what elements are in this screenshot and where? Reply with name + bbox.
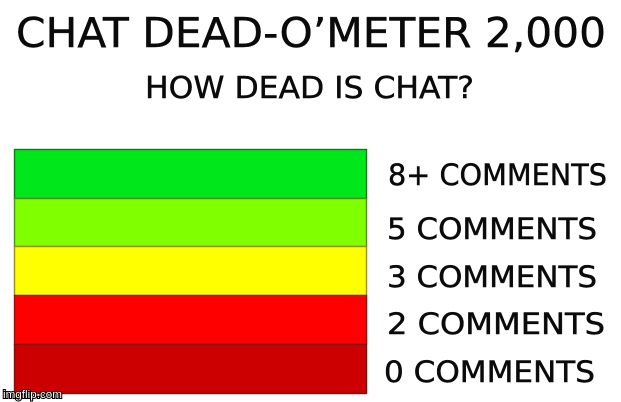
- title: CHAT DEAD-O’METER 2,000: [16, 9, 606, 57]
- label: 8+ comments: 8+ COMMENTS: [388, 158, 607, 192]
- meter: [14, 150, 366, 394]
- level: 3 comments yellow: [14, 246, 366, 296]
- subtitle: HOW DEAD IS CHAT?: [145, 71, 474, 106]
- watermark: imgflip.com: [3, 389, 62, 401]
- label: 2 comments: 2 COMMENTS: [387, 307, 605, 341]
- level: 2 comments red: [14, 296, 366, 344]
- label: 3 comments: 3 COMMENTS: [387, 260, 597, 294]
- label: 0 comments: 0 COMMENTS: [384, 355, 595, 389]
- label: 5 comments: 5 COMMENTS: [387, 212, 597, 246]
- level: 8+ comments green: [14, 150, 366, 198]
- level: 5 comments lime: [14, 198, 366, 246]
- level: 0 comments dark red: [14, 344, 366, 394]
